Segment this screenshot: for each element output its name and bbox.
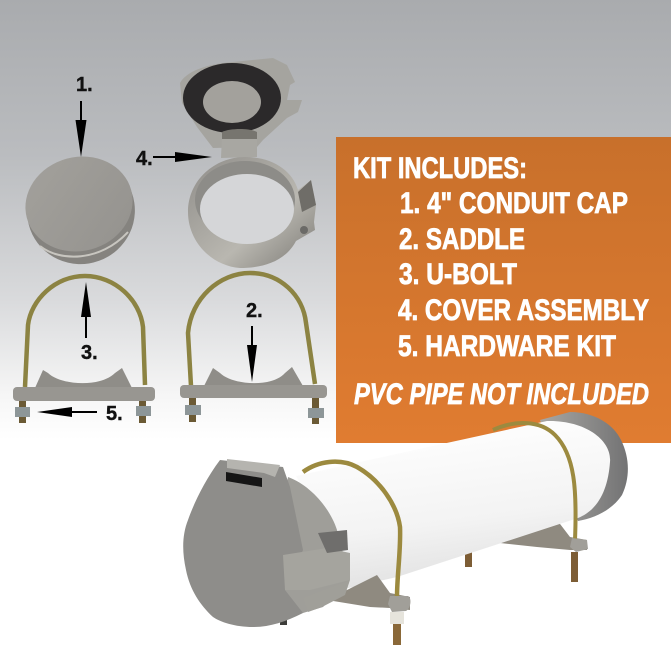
u-bolt [25,276,145,387]
part: cover assembly ring [188,157,316,268]
callout 1 [76,74,93,157]
far bolts [465,550,578,582]
heading: kit includes: KIT INCLUDES: [353,152,527,185]
u-bolt [188,273,315,386]
list item 3: 3. U-BOLT [399,258,517,291]
label 5: 5. [106,403,123,425]
part: right u-bolt and saddle [180,273,327,424]
near u-bolt [303,462,400,597]
label 4: 4. [136,148,153,170]
saddle plate [180,385,327,398]
saddle [35,368,132,388]
small rear bolt [280,618,287,625]
arrow 4 [153,152,212,162]
label 2: 2. [246,300,263,322]
lower hinge knob [303,580,350,612]
assembled product [183,412,628,645]
saddle plate [13,387,155,401]
washer [390,612,404,624]
white pvc pipe [296,421,610,590]
part: cover assembly lid [180,58,302,158]
panel: kit includes [336,137,671,443]
list item 2: 2. SADDLE [399,223,525,256]
cover latch [227,459,280,477]
near bolt [393,612,401,645]
bolts and nuts [19,401,146,423]
part: conduit cap [12,143,150,279]
arrow 1 [76,101,86,157]
cover face [183,460,303,627]
part: left u-bolt and saddle [13,276,155,423]
arrow 2 [247,326,257,382]
right end cap [540,412,628,521]
far plate [570,538,588,552]
label 1: 1. [76,74,93,96]
far u-bolt [493,423,576,540]
hinge [283,548,350,590]
bolts and nuts [189,398,319,424]
background gradient [0,0,671,440]
hinge pin [318,530,348,553]
callout 4 [136,148,212,170]
saddle [204,367,303,386]
label 3: 3. [81,342,98,364]
orange panel background [336,137,671,443]
near plate [388,596,410,612]
callout 5 [37,403,123,425]
callout 3 [81,282,98,364]
callout 2 [246,300,263,382]
latch slot [226,472,262,487]
arrow 3 [81,282,91,338]
arrow 5 [37,407,97,417]
near saddle [327,575,410,610]
list item 5: 5. HARDWARE KIT [398,330,616,363]
far saddle [500,520,587,550]
cover body [270,477,350,613]
